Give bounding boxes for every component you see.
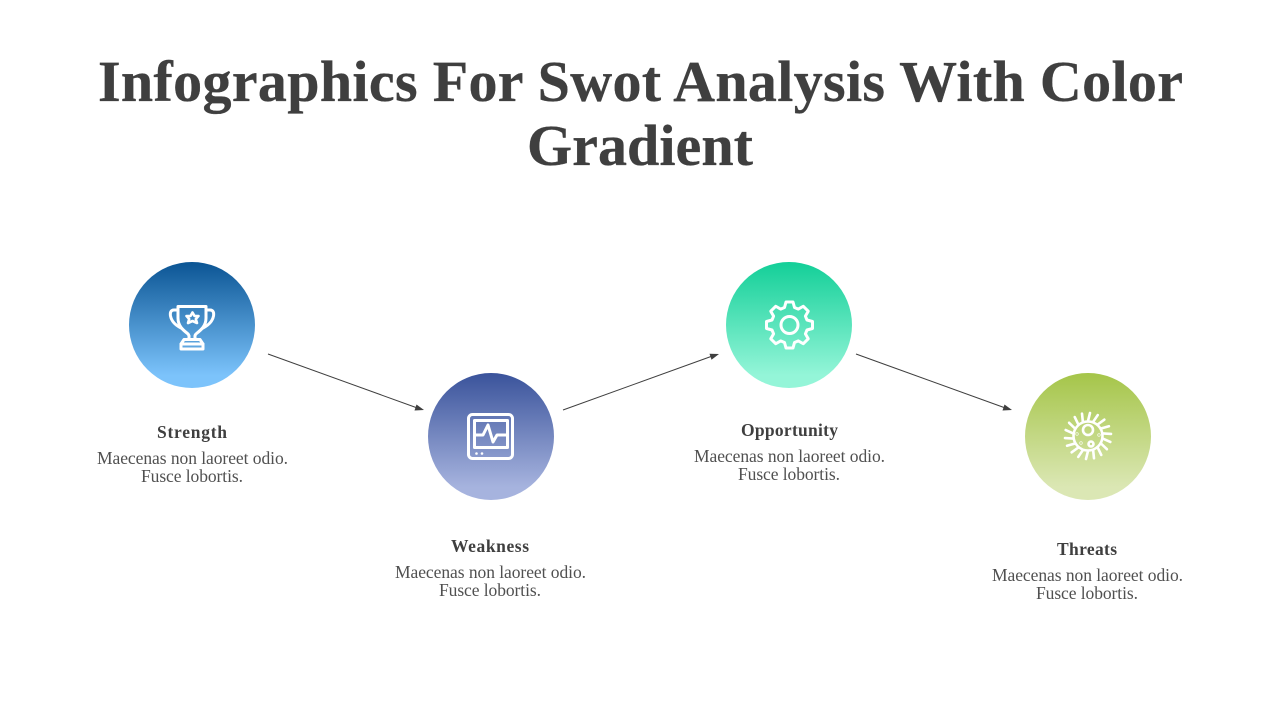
arrow: weakness to opportunity bbox=[563, 354, 719, 410]
weakness circle bbox=[428, 373, 554, 500]
text: opportunity description: Maecenas non laoreet odio. bbox=[694, 446, 885, 466]
title bbox=[98, 49, 1183, 178]
text: threats description: Fusce lobortis. bbox=[1036, 583, 1138, 603]
text: threats description: Maecenas non laoreet odio. bbox=[992, 565, 1183, 585]
icon: gear bbox=[766, 302, 812, 348]
text: weakness description: Maecenas non laoreet odio. bbox=[395, 562, 586, 582]
title: Infographics For Swot Analysis With Color bbox=[98, 49, 1183, 114]
panel: weakness bbox=[395, 373, 586, 600]
panel: strength bbox=[97, 262, 288, 486]
opportunity circle bbox=[726, 262, 852, 388]
icon: virus bbox=[1065, 413, 1111, 459]
arrow: strength to weakness bbox=[268, 354, 424, 410]
heading: threats: Threats bbox=[1057, 539, 1117, 559]
heading: weakness: Weakness bbox=[451, 536, 529, 556]
threats circle bbox=[1025, 373, 1151, 500]
text: opportunity description bbox=[694, 446, 885, 484]
heading: strength: Strength bbox=[157, 422, 227, 442]
heading: opportunity: Opportunity bbox=[741, 420, 838, 440]
icon: trophy bbox=[170, 306, 214, 349]
text: weakness description bbox=[395, 562, 586, 600]
panel: opportunity bbox=[694, 262, 885, 484]
panel: threats bbox=[992, 373, 1183, 603]
text: threats description bbox=[992, 565, 1183, 603]
arrow: opportunity to threats bbox=[856, 354, 1012, 410]
text: opportunity description: Fusce lobortis. bbox=[738, 464, 840, 484]
text: weakness description: Fusce lobortis. bbox=[439, 580, 541, 600]
title: Gradient bbox=[527, 113, 754, 178]
strength circle bbox=[129, 262, 255, 388]
text: strength description: Fusce lobortis. bbox=[141, 466, 243, 486]
text: strength description: Maecenas non laoreet odio. bbox=[97, 448, 288, 468]
icon: monitor bbox=[468, 414, 512, 458]
text: strength description bbox=[97, 448, 288, 486]
